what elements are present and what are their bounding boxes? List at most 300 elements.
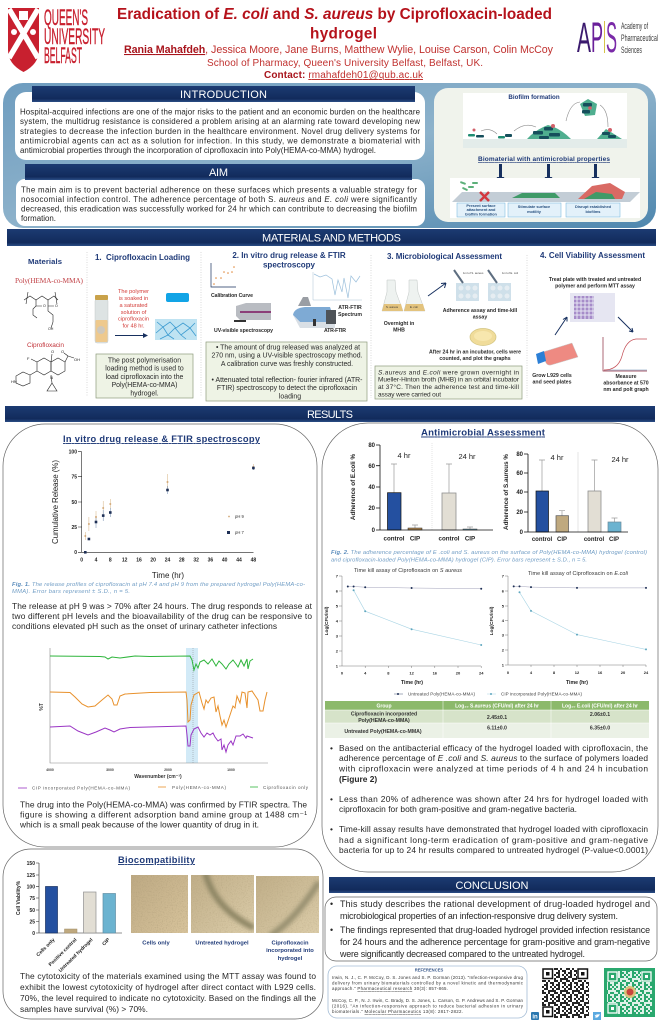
table: log reduction: Group: [376, 704, 392, 710]
chart: adherence of E. coli: [350, 443, 493, 542]
chart: cell viability: Positive control: [48, 937, 79, 968]
chart: adherence of E. coli: control: [384, 536, 405, 542]
chart: adherence of S. aureus: 80: [516, 452, 524, 458]
icon: assay plate: [570, 293, 615, 322]
label: ATR-FTIR spectrum: Spectrum: [338, 312, 362, 318]
heading: materials and methods: [7, 229, 656, 246]
chemical structure: ciprofloxacin: HN: [11, 379, 17, 384]
chemical structure: ciprofloxacin: [11, 349, 80, 391]
text: biocompatibility result: exhibit the lowest cytotoxicity of hydrogel after direct contact with L929 cells.: [20, 982, 316, 992]
heading: introduction: [32, 86, 415, 102]
callout: FTIR method: FTIR) spectroscopy to detect the ciprofloxacin: [217, 385, 357, 392]
legend: time kill charts: CIP incorporated Poly(HEMA-co-MMA): [501, 692, 582, 696]
label: calibration curve: Calibration Curve: [211, 293, 253, 299]
text: biocompatibility result: The cytotoxicity of the materials examined using the MTT assay was found to: [20, 971, 316, 981]
chart: time kill S. aureus: Time (hr): [401, 680, 423, 686]
legend: time kill charts: [394, 692, 582, 696]
chart: time kill S. aureus: Log(CFU/ml): [324, 606, 330, 635]
logo: Queen's University Belfast: QUEEN'S: [44, 5, 88, 30]
text: biocompatibility result: samples have survival (%) > 70%.: [20, 1004, 148, 1014]
label: ATR-FTIR spectrum: ATR-FTIR: [338, 305, 362, 311]
chart: time kill E. coli: Log(CFU/ml): [489, 606, 495, 635]
panel: conclusion: microbiological properties of an infection-responsive drug delivery system.: [340, 911, 618, 921]
label: treat plate: Treat plate with treated and untreated: [549, 277, 641, 283]
heading: conclusion: [329, 877, 655, 893]
panel: cell viability assessment: [532, 251, 649, 393]
label: measure absorbance: Measure: [615, 374, 637, 380]
logo: Academy of Pharmaceutical Sciences: A: [577, 14, 591, 62]
chart: cumulative release: 50: [71, 500, 77, 506]
heading: in vitro drug release: In vitro drug release & FTIR spectroscopy: [63, 434, 261, 444]
chart: cumulative release: 0: [74, 550, 77, 556]
chart: adherence of E. coli: 4 hr: [398, 451, 411, 460]
chart: time kill E. coli: [489, 571, 649, 686]
icon: culture flasks: S. aureus: [386, 305, 399, 309]
icon: well plates and pipettes: 1ml of S. aureus: [463, 271, 484, 275]
panel: ciprofloxacin loading: [95, 253, 197, 398]
chart: time kill S. aureus: 8: [387, 670, 390, 676]
chart: cumulative release: 4: [95, 558, 98, 564]
label: treat plate: [549, 277, 641, 290]
arrow: flask to plate: [555, 317, 567, 335]
logo: Queen's University Belfast: BELFAST: [44, 43, 82, 68]
introduction text box: antimicrobial agents can act as a solution for infection. In this study, we demonstrate a biomaterial with: [20, 136, 420, 146]
authors and affiliation: School of Pharmacy, Queen's University Belfast, Belfast, UK.: [207, 58, 483, 69]
label: grow L929 cells: [532, 373, 572, 386]
label: ATR-FTIR spectrum: [338, 305, 362, 318]
chart: time kill E. coli: 4: [530, 670, 533, 675]
label: incubator counting: After 24 hr in an incubator, cells were: [429, 350, 521, 356]
soaking instructions: The polymer: [118, 289, 149, 295]
icon: cell culture flask: [536, 343, 578, 365]
introduction text box: system, the multidrug resistance is considered a problem arising at an alarming rate toward developing new: [20, 117, 420, 126]
biomaterial antimicrobial actions diagram: Stimulate surface: [518, 204, 551, 209]
logo: Academy of Pharmaceutical Sciences: [577, 14, 658, 62]
legend: FTIR spectra: Poly(HEMA-co-MMA): [172, 785, 226, 790]
soaking instructions: a saturated: [120, 303, 148, 309]
label: measure absorbance: absorbance at 570: [603, 380, 649, 386]
authors and affiliation: [124, 44, 554, 81]
table: log reduction: 6.35±0.0: [590, 726, 610, 732]
panel: conclusion: for 24 hours and the adherence percentage for gram-positive and gram-negative: [340, 937, 650, 947]
chart: cumulative release: 16: [136, 558, 142, 564]
chart: time kill S. aureus: [324, 568, 484, 686]
chart: time kill E. coli: 16: [598, 670, 603, 675]
callout: FTIR method: A calibration curve was freshly constructed.: [221, 361, 353, 368]
callout: microbiological method: S.aureus and E.coli were grown overnight in: [378, 370, 519, 376]
introduction text box: strategies to decrease the infection burden in the healthcare environment. Novel drug delivery systems for: [20, 127, 420, 136]
authors and affiliation: Contact: rmahafdeh01@qub.ac.uk: [264, 70, 424, 81]
biomaterial antimicrobial actions diagram: biofilm formation: [465, 212, 498, 216]
callout: loading method: loading method is used to: [105, 366, 184, 372]
heading: aim: AIM: [209, 167, 228, 179]
chart: FTIR spectra: [39, 648, 268, 780]
label: UV-visible spectroscopy: UV-visible spectroscopy: [214, 328, 273, 334]
panel: conclusion: The findings represented that drug-loaded hydrogel provided infection resistance: [340, 925, 650, 935]
biomaterial antimicrobial actions diagram: Disrupt established: [575, 204, 612, 209]
panel: conclusion: [325, 897, 657, 961]
chart: cumulative release: 100: [69, 450, 77, 456]
captions: micrographs: Untreated hydrogel: [195, 940, 249, 946]
chart: time kill E. coli: 5: [502, 604, 505, 608]
aim text box: nosocomial infection control. The adherence percentage of both S. aureus and E. coli were significantly: [21, 195, 417, 204]
chart: time kill E. coli: 6: [502, 588, 505, 594]
text: antimicrobial bullets: Less than 20% of adherence was shown after 24 hrs for hydrogel loaded with: [339, 794, 648, 804]
icon: culture flasks: E. coli: [410, 305, 418, 309]
micrograph: ciprofloxacin hydrogel: [256, 876, 319, 936]
chart: FTIR spectra: 2000: [164, 768, 172, 772]
heading: drug release and FTIR: spectroscopy: [263, 260, 316, 270]
aim text box: formation.: [21, 214, 56, 223]
panel: references: approach." Pharmaceutical research 30(3): 857-865.: [332, 986, 448, 991]
text: antimicrobial bullets: [330, 743, 648, 855]
table: log reduction: Log₁₀ E.coli (CFU/ml) after 24 hr: [562, 704, 638, 710]
panel: references: McCoy, C. P., N. J. Irwin, C. Brady, D. S. Jones, L. Carson, G. P. Andrews and S. P. Gorman: [332, 998, 524, 1003]
chart: cumulative release: 75: [71, 474, 77, 480]
chart: cell viability: Cell Viability%: [16, 880, 22, 915]
callout: FTIR method: [206, 342, 367, 401]
chart: time kill E. coli: 8: [553, 670, 556, 675]
chart: time kill S. aureus: 3: [336, 634, 339, 638]
chart: adherence of E. coli: 40: [368, 485, 376, 491]
QR code: LinkedIn: [542, 968, 589, 1018]
chemical structure: polymer: OH: [48, 327, 54, 331]
chart: cumulative release: pH 7: [235, 530, 245, 535]
icon: vial: [95, 295, 108, 343]
chart: adherence of S. aureus: [503, 452, 629, 543]
callout: FTIR method: 270 nm, using a UV-visible spectroscopy method.: [212, 352, 363, 360]
callout: microbiological method: Mueller-Hinton broth (MHB) in an orbital incubator: [378, 376, 520, 384]
panel: references: Irwin, N. J., C. P. McCoy, D. S. Jones and S. P. Gorman (2013). "Infection-responsive drug: [332, 975, 524, 980]
label: measure absorbance: [603, 374, 649, 393]
chart: time kill E. coli: 24: [644, 670, 649, 675]
chart: time kill S. aureus: 4: [364, 670, 367, 676]
chart: time kill E. coli: 20: [621, 670, 626, 675]
chart: cell viability: 0: [32, 931, 35, 937]
icon: culture flasks: [382, 280, 425, 311]
chart: cumulative release: 40: [222, 558, 228, 564]
chart: adherence of E. coli: CIP: [410, 536, 420, 542]
chemical structure: ciprofloxacin: F: [27, 356, 30, 361]
text: antimicrobial bullets: ciprofloxacin for both gram-positive and gram-negative bacteria.: [339, 804, 577, 814]
chart: time kill E. coli: 0: [507, 670, 510, 675]
icon: LinkedIn: [531, 1012, 539, 1020]
captions: micrographs: hydrogel: [278, 956, 303, 962]
text: release result: two different pH levels and the bioavailability of the drug can be responsive to: [12, 611, 312, 621]
panel: materials: [11, 257, 84, 391]
heading: antimicrobial assessment: Antimicrobial Assessment: [421, 428, 546, 438]
heading: biomaterial with antimicrobial properties: Biomaterial with antimicrobial properties: [478, 156, 610, 163]
chart: cumulative release: 20: [150, 558, 156, 564]
chart: cumulative release: 24: [165, 558, 170, 564]
chart: time kill S. aureus: 5: [336, 604, 339, 608]
chart: adherence of S. aureus: CIP: [557, 537, 567, 543]
chemical structure: ciprofloxacin: N: [50, 375, 53, 380]
chart: time kill S. aureus: 20: [456, 670, 461, 676]
figure caption 1: Fig. 1. The release profiles of ciprofloxacin at pH 7.4 and pH 9 from the prepared hydrogel Poly(HEMA-co-: [12, 582, 305, 588]
chart: adherence of E. coli: 20: [368, 506, 376, 512]
chart: adherence of E. coli: control: [439, 536, 460, 542]
table: log reduction: 2.45±0.1: [487, 715, 507, 721]
soaking instructions: solution of: [121, 310, 147, 316]
icon: hydrogel disc: [166, 293, 189, 302]
chart: time kill S. aureus: Time kill assay of Ciprofloxacin on S aureus: [354, 568, 462, 574]
biofilm formation diagram: Biofilm formation: [508, 94, 560, 101]
chart: cell viability: Cells only: [35, 937, 57, 958]
chart: time kill E. coli: 7: [502, 574, 505, 578]
captions: micrographs: Cells only: [142, 940, 170, 946]
aim text box: [16, 179, 425, 226]
chart: cell viability: 100: [27, 884, 35, 890]
legend: FTIR spectra: Ciprofloxacin only: [263, 785, 309, 790]
text: release result: [12, 601, 313, 631]
chart: cumulative release: 32: [193, 558, 199, 564]
text: antimicrobial bullets: Time-kill assay results have demonstrated that hydrogel loaded with ciprofloxacin: [339, 824, 648, 834]
label: ciprofloxacin: Ciprofloxacin: [27, 342, 64, 349]
icon: ATR-FTIR instrument: [293, 297, 336, 328]
icon: well plates and pipettes: [454, 270, 518, 301]
chart: time kill S. aureus: 0: [341, 670, 344, 676]
chart: time kill S. aureus: 12: [409, 670, 415, 676]
table: log reduction: Untreated Poly(HEMA-co-MMA): [344, 729, 422, 735]
chart: cumulative release: [51, 450, 256, 580]
text: FTIR result: The drug into the Poly(HEMA-co-MMA) was confirmed by FTIR spectra. The: [20, 800, 307, 810]
chart: time kill E. coli: Time kill assay of Ciprofloxacin on E.coli: [528, 571, 629, 577]
chart: FTIR spectra: 3000: [106, 768, 114, 772]
chart: cell viability: [16, 861, 122, 974]
panel: in vitro drug release and FTIR: [3, 424, 317, 847]
title: [117, 6, 552, 42]
text: antimicrobial bullets: Based on the antibacterial efficacy of the hydrogel loaded with ciprofloxacin, the: [339, 743, 648, 753]
panel: references: biomaterials." Molecular Pharmaceutics 13(8): 2817-2822.: [332, 1009, 463, 1014]
chemical structure: ciprofloxacin: O: [51, 349, 54, 354]
panel: conclusion: were significantly decreased compared to the untreated hydrogel.: [339, 949, 585, 959]
biomaterial antimicrobial actions diagram: motility: [527, 209, 542, 214]
chart: cumulative release: 48: [251, 558, 256, 564]
chart: adherence of S. aureus: CIP: [609, 537, 619, 543]
heading: results: RESULTS: [307, 409, 353, 421]
figure caption 2: and ciprofloxacin-loaded Poly(HEMA-co-MMA) hydrogel (CIP). Error bars represent ± S.D., n = 5.: [331, 558, 587, 564]
chart: time kill S. aureus: 24: [479, 670, 484, 676]
chart: adherence of E. coli: 60: [368, 464, 376, 470]
label: incubator counting: counted, and plot the graphs: [439, 356, 511, 362]
chart: time kill E. coli: 3: [502, 632, 505, 638]
chart: adherence of E. coli: 80: [368, 443, 376, 449]
text: antimicrobial bullets: had a significant long-term eradication of gram-positive and gram-negative: [339, 835, 648, 845]
label: treat plate: polymer and perform MTT assay: [555, 284, 635, 290]
chart: adherence of S. aureus: 24 hr: [611, 455, 629, 464]
table: log reduction: [325, 701, 649, 738]
label: ATR-FTIR: ATR-FTIR: [324, 328, 346, 334]
table: log reduction: Ciprofloxacin incorporated: [351, 712, 417, 718]
heading: conclusion: CONCLUSION: [456, 880, 529, 892]
heading: aim: [25, 164, 412, 180]
heading: results: [5, 406, 655, 422]
title: hydrogel: [310, 26, 377, 42]
soaking instructions: is soaked in: [119, 296, 148, 302]
callout: FTIR method: loading: [279, 394, 301, 400]
biomaterial antimicrobial actions diagram: attachment and: [467, 207, 496, 212]
label: overnight in MHB: [384, 321, 414, 334]
callout: microbiological method: [375, 366, 522, 399]
chart: cell viability: 50: [29, 908, 35, 914]
aim text box: The main aim is to prevent bacterial adherence on these surfaces which presents a valuable strategy for: [21, 186, 417, 194]
label: grow L929 cells: and seed plates: [533, 380, 572, 386]
chart: FTIR spectra: 4000: [46, 768, 54, 772]
chart: adherence of E. coli: 24 hr: [458, 452, 476, 461]
panel: microbiological assessment: [375, 252, 522, 399]
chart: cell viability: Untreated hydrogel: [58, 937, 95, 974]
text: antimicrobial bullets: adherence percentage of E .coli and S. aureus to the surface of polymers loaded: [339, 753, 648, 763]
aim text box: decreased, this eradication was successfully worked for 24 hr which can contribute to decreasing the biofilm: [21, 204, 417, 214]
callout: loading method: [96, 354, 193, 398]
panel: biofilm illustration: [434, 88, 648, 222]
legend: FTIR spectra: [18, 785, 309, 790]
chart: cumulative release: 8: [109, 558, 112, 564]
chart: time kill S. aureus: 2: [336, 648, 339, 654]
panel: drug release and FTIR method: [206, 251, 367, 401]
logo: Academy of Pharmaceutical Sciences: P: [591, 14, 603, 62]
chart: cumulative release: 28: [179, 558, 185, 564]
icon: well plates and pipettes: 1ml of E. coli: [502, 271, 518, 275]
figure caption 2: [331, 550, 647, 564]
heading: biocompatibility: Biocompatibility: [118, 855, 196, 865]
chart: time kill E. coli: 12: [575, 670, 580, 675]
chart: adherence of S. aureus: 40: [516, 490, 524, 496]
panel: references: (2016). "An infection-responsive approach to reduce bacterial adhesion in urinary: [332, 1004, 524, 1008]
chart: time kill S. aureus: 16: [433, 670, 438, 676]
label: adherence assay: [443, 308, 518, 320]
soaking instructions: for 48 hr.: [122, 324, 145, 330]
label: polymer: Poly(HEMA-co-MMA): [15, 276, 84, 285]
chart: time kill E. coli: Time (hr): [566, 680, 588, 686]
text: release result: The release at pH 9 was > 70% after 24 hours. The drug responds to release at: [12, 601, 313, 611]
logo: Academy of Pharmaceutical Sciences: S: [606, 14, 617, 62]
callout: microbiological method: assay were carried out: [378, 392, 441, 398]
QR code: Twitter: [604, 968, 655, 1017]
callout: loading method: Poly(HEMA-co-MMA): [112, 382, 177, 389]
callout: microbiological method: at 37°C. Then the adherence test and time-kill: [378, 383, 520, 391]
chart: adherence of S. aureus: 4 hr: [551, 453, 564, 462]
panel: biocompatibility: [3, 849, 323, 1019]
chart: cumulative release: 44: [236, 558, 242, 564]
text: antimicrobial bullets: •: [330, 824, 333, 834]
chart: adherence of E. coli: 0: [372, 528, 376, 534]
legend: FTIR spectra: CIP incorporated Poly(HEMA-co-MMA): [32, 786, 130, 790]
icon: Twitter: [593, 1012, 601, 1020]
chart: adherence of S. aureus: control: [584, 537, 604, 543]
heading: drug release and FTIR: [232, 251, 346, 270]
chemical structure: polymer: O: [55, 304, 58, 308]
panel: conclusion: This study describes the rational development of drug-loaded hydrogel and: [340, 899, 650, 909]
chemical structure: ciprofloxacin: OH: [74, 357, 80, 362]
chart: cell viability: 125: [27, 873, 35, 879]
chart: adherence of E. coli: Adherence of E.coli %: [350, 454, 357, 520]
table: log reduction: 2.06±0.1: [590, 712, 610, 718]
label: grow L929 cells: Grow L929 cells: [532, 373, 572, 379]
text: release result: conditions elevated pH such as the onset of urinary catheter infections: [12, 621, 277, 631]
chart: adherence of S. aureus: 60: [516, 471, 524, 477]
biomaterial antimicrobial actions diagram: [450, 178, 640, 218]
text: antimicrobial bullets: •: [330, 743, 333, 753]
text: biocompatibility result: [20, 971, 316, 1014]
heading: ciprofloxacin loading: 1. Ciprofloxacin Loading: [95, 253, 190, 262]
label: measure absorbance: nm and polt graph: [603, 387, 649, 393]
micrograph: cells only: [131, 875, 188, 933]
callout: FTIR method: • The amount of drug released was analyzed at: [216, 344, 360, 352]
arrow: plate to chart: [618, 317, 633, 332]
captions: micrographs: incorporated into: [266, 948, 314, 954]
figure caption 1: MMA). Error bars represent ± S.D., n = 5.: [12, 589, 130, 595]
text: antimicrobial bullets: bacteria for up to 24 hr results compared to untreated hydrogel (P-value<0.0001): [339, 845, 648, 855]
text: biocompatibility result: 70%, the level required to indicate no cytotoxicity. Based on the findings all the: [20, 993, 316, 1003]
chart: adherence of S. aureus: 0: [520, 530, 524, 536]
logo: Queen's University Belfast: [8, 5, 105, 72]
callout: loading method: The post polymerisation: [108, 358, 181, 364]
icon: hydrogel mesh: [155, 319, 197, 340]
chart: FTIR spectra: Wavenumber (cm⁻¹): [134, 774, 182, 780]
biomaterial antimicrobial actions diagram: biofilms: [586, 209, 600, 214]
heading: drug release and FTIR: 2. In vitro drug release & FTIR: [232, 251, 346, 260]
arrow: flasks to wells: [428, 283, 446, 296]
table: log reduction: 6.11±0.0: [487, 726, 507, 732]
chart: FTIR spectra: 1000: [227, 768, 235, 772]
chart: adherence of E. coli: CIP: [465, 536, 475, 542]
chart: time kill S. aureus: 4: [336, 618, 339, 624]
arrow: [115, 333, 148, 338]
chart: adherence of S. aureus: control: [532, 537, 552, 543]
panel: references: REFERENCES: [415, 968, 444, 972]
soaking instructions: [118, 289, 149, 330]
soaking instructions: ciprofloxacin: [118, 316, 149, 322]
heading: microbiological assessment: 3. Microbiological Assessment: [387, 252, 502, 261]
introduction text box: Hospital-acquired infections are one of the major risks to the patient and an economic burden on the healthcare: [20, 108, 421, 116]
chart: adherence of S. aureus: Adherence of S.aureus %: [503, 454, 510, 530]
label: overnight in MHB: Overnight in: [384, 321, 414, 327]
introduction text box: [15, 92, 425, 160]
chart: cumulative release: 36: [208, 558, 213, 564]
chart: absorbance curve: [603, 337, 647, 371]
chart: cell viability: 150: [27, 861, 35, 867]
chart: cumulative release: pH 9: [235, 514, 245, 519]
chart: adherence of S. aureus: 20: [516, 510, 524, 516]
panel: references: delivery from urinary biomaterials controlled by a novel kinetic and thermodynamic: [332, 980, 524, 986]
chemical structure: polymer: O: [43, 304, 46, 308]
logo: Academy of Pharmaceutical Sciences: Sciences: [621, 45, 642, 56]
text: antimicrobial bullets: •: [330, 794, 333, 804]
chart: time kill S. aureus: 1: [336, 664, 339, 668]
chemical structure: polymer: [24, 292, 58, 331]
biofilm formation diagram: [463, 93, 627, 148]
panel: conclusion: •: [330, 899, 333, 909]
chart: cumulative release: 12: [122, 558, 128, 564]
panel: conclusion: •: [330, 925, 333, 935]
heading: introduction: INTRODUCTION: [180, 89, 267, 101]
introduction text box: antimicrobial properties through the incorporation of ciprofloxacin into Poly(HEMA-co-MMA) hydrogel.: [20, 146, 376, 155]
chart: cell viability: 25: [29, 919, 35, 925]
chart: cumulative release: Cumulative Release (%): [51, 460, 60, 544]
biomaterial antimicrobial actions diagram: Present surface: [466, 203, 496, 208]
chart: cell viability: CIP: [101, 937, 112, 947]
table: log reduction: Log₁₀ S.aureus (CFU/ml) after 24 hr: [455, 704, 539, 710]
chart: cumulative release: Time (hr): [152, 571, 184, 580]
chart: ATR-FTIR spectrum: [313, 272, 362, 300]
chart: time kill E. coli: 2: [502, 648, 505, 652]
text: antimicrobial bullets: with ciprofloxacin were analyzed at time periods of 4 h and 24 h incubation: [338, 764, 648, 774]
chart: cumulative release: 0: [80, 558, 83, 564]
figure caption 1: [12, 582, 305, 595]
text: antimicrobial bullets: (Figure 2): [339, 774, 377, 784]
